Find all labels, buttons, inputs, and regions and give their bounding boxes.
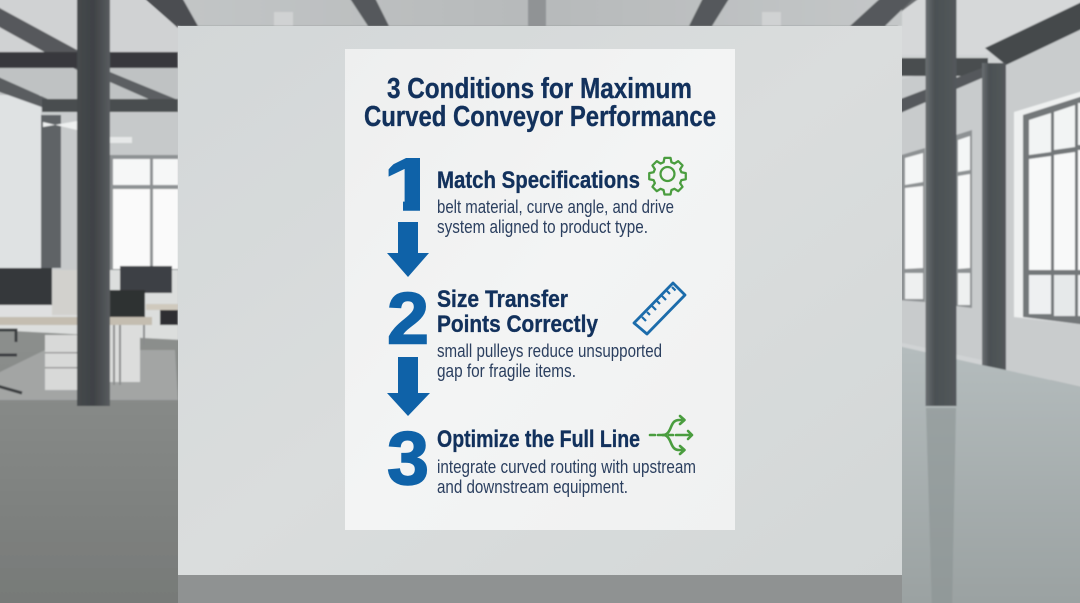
step 1: match specifications: [388, 156, 687, 237]
title: 3 Conditions for Maximum: [387, 73, 692, 105]
body text: system aligned to product type.: [437, 216, 648, 237]
icon: routing arrows: [650, 416, 692, 454]
arrow: step 2 to 3: [387, 357, 430, 416]
office background: left side: [0, 0, 182, 603]
title: [364, 73, 716, 133]
heading: Points Correctly: [437, 311, 598, 338]
step 2: size transfer points: [387, 278, 685, 381]
icon: ruler: [634, 283, 685, 334]
heading: Size Transfer: [437, 286, 568, 313]
heading: Match Specifications: [437, 167, 640, 194]
floor strip below wall: [178, 575, 902, 603]
number 1: 1: [383, 143, 437, 226]
body text: [437, 196, 674, 237]
icon: gear: [649, 158, 686, 194]
body text: integrate curved routing with upstream: [437, 456, 696, 477]
number 2: 2: [387, 278, 429, 360]
arrow: step 1 to 2: [387, 222, 429, 277]
step 3: optimize the full line: [387, 416, 696, 500]
heading: [437, 286, 598, 338]
body text: belt material, curve angle, and drive: [437, 196, 674, 217]
title: Curved Conveyor Performance: [364, 101, 716, 133]
body text: small pulleys reduce unsupported: [437, 340, 662, 361]
number 3: 3: [387, 416, 429, 500]
body text: [437, 340, 662, 381]
heading: Optimize the Full Line: [437, 426, 640, 453]
poster panel: [345, 49, 735, 530]
ceiling behind wall top: [140, 0, 918, 26]
body text: and downstream equipment.: [437, 476, 628, 497]
display wall: [178, 26, 902, 575]
office background: right side: [898, 0, 1080, 603]
body text: [437, 456, 696, 497]
body text: gap for fragile items.: [437, 360, 576, 381]
